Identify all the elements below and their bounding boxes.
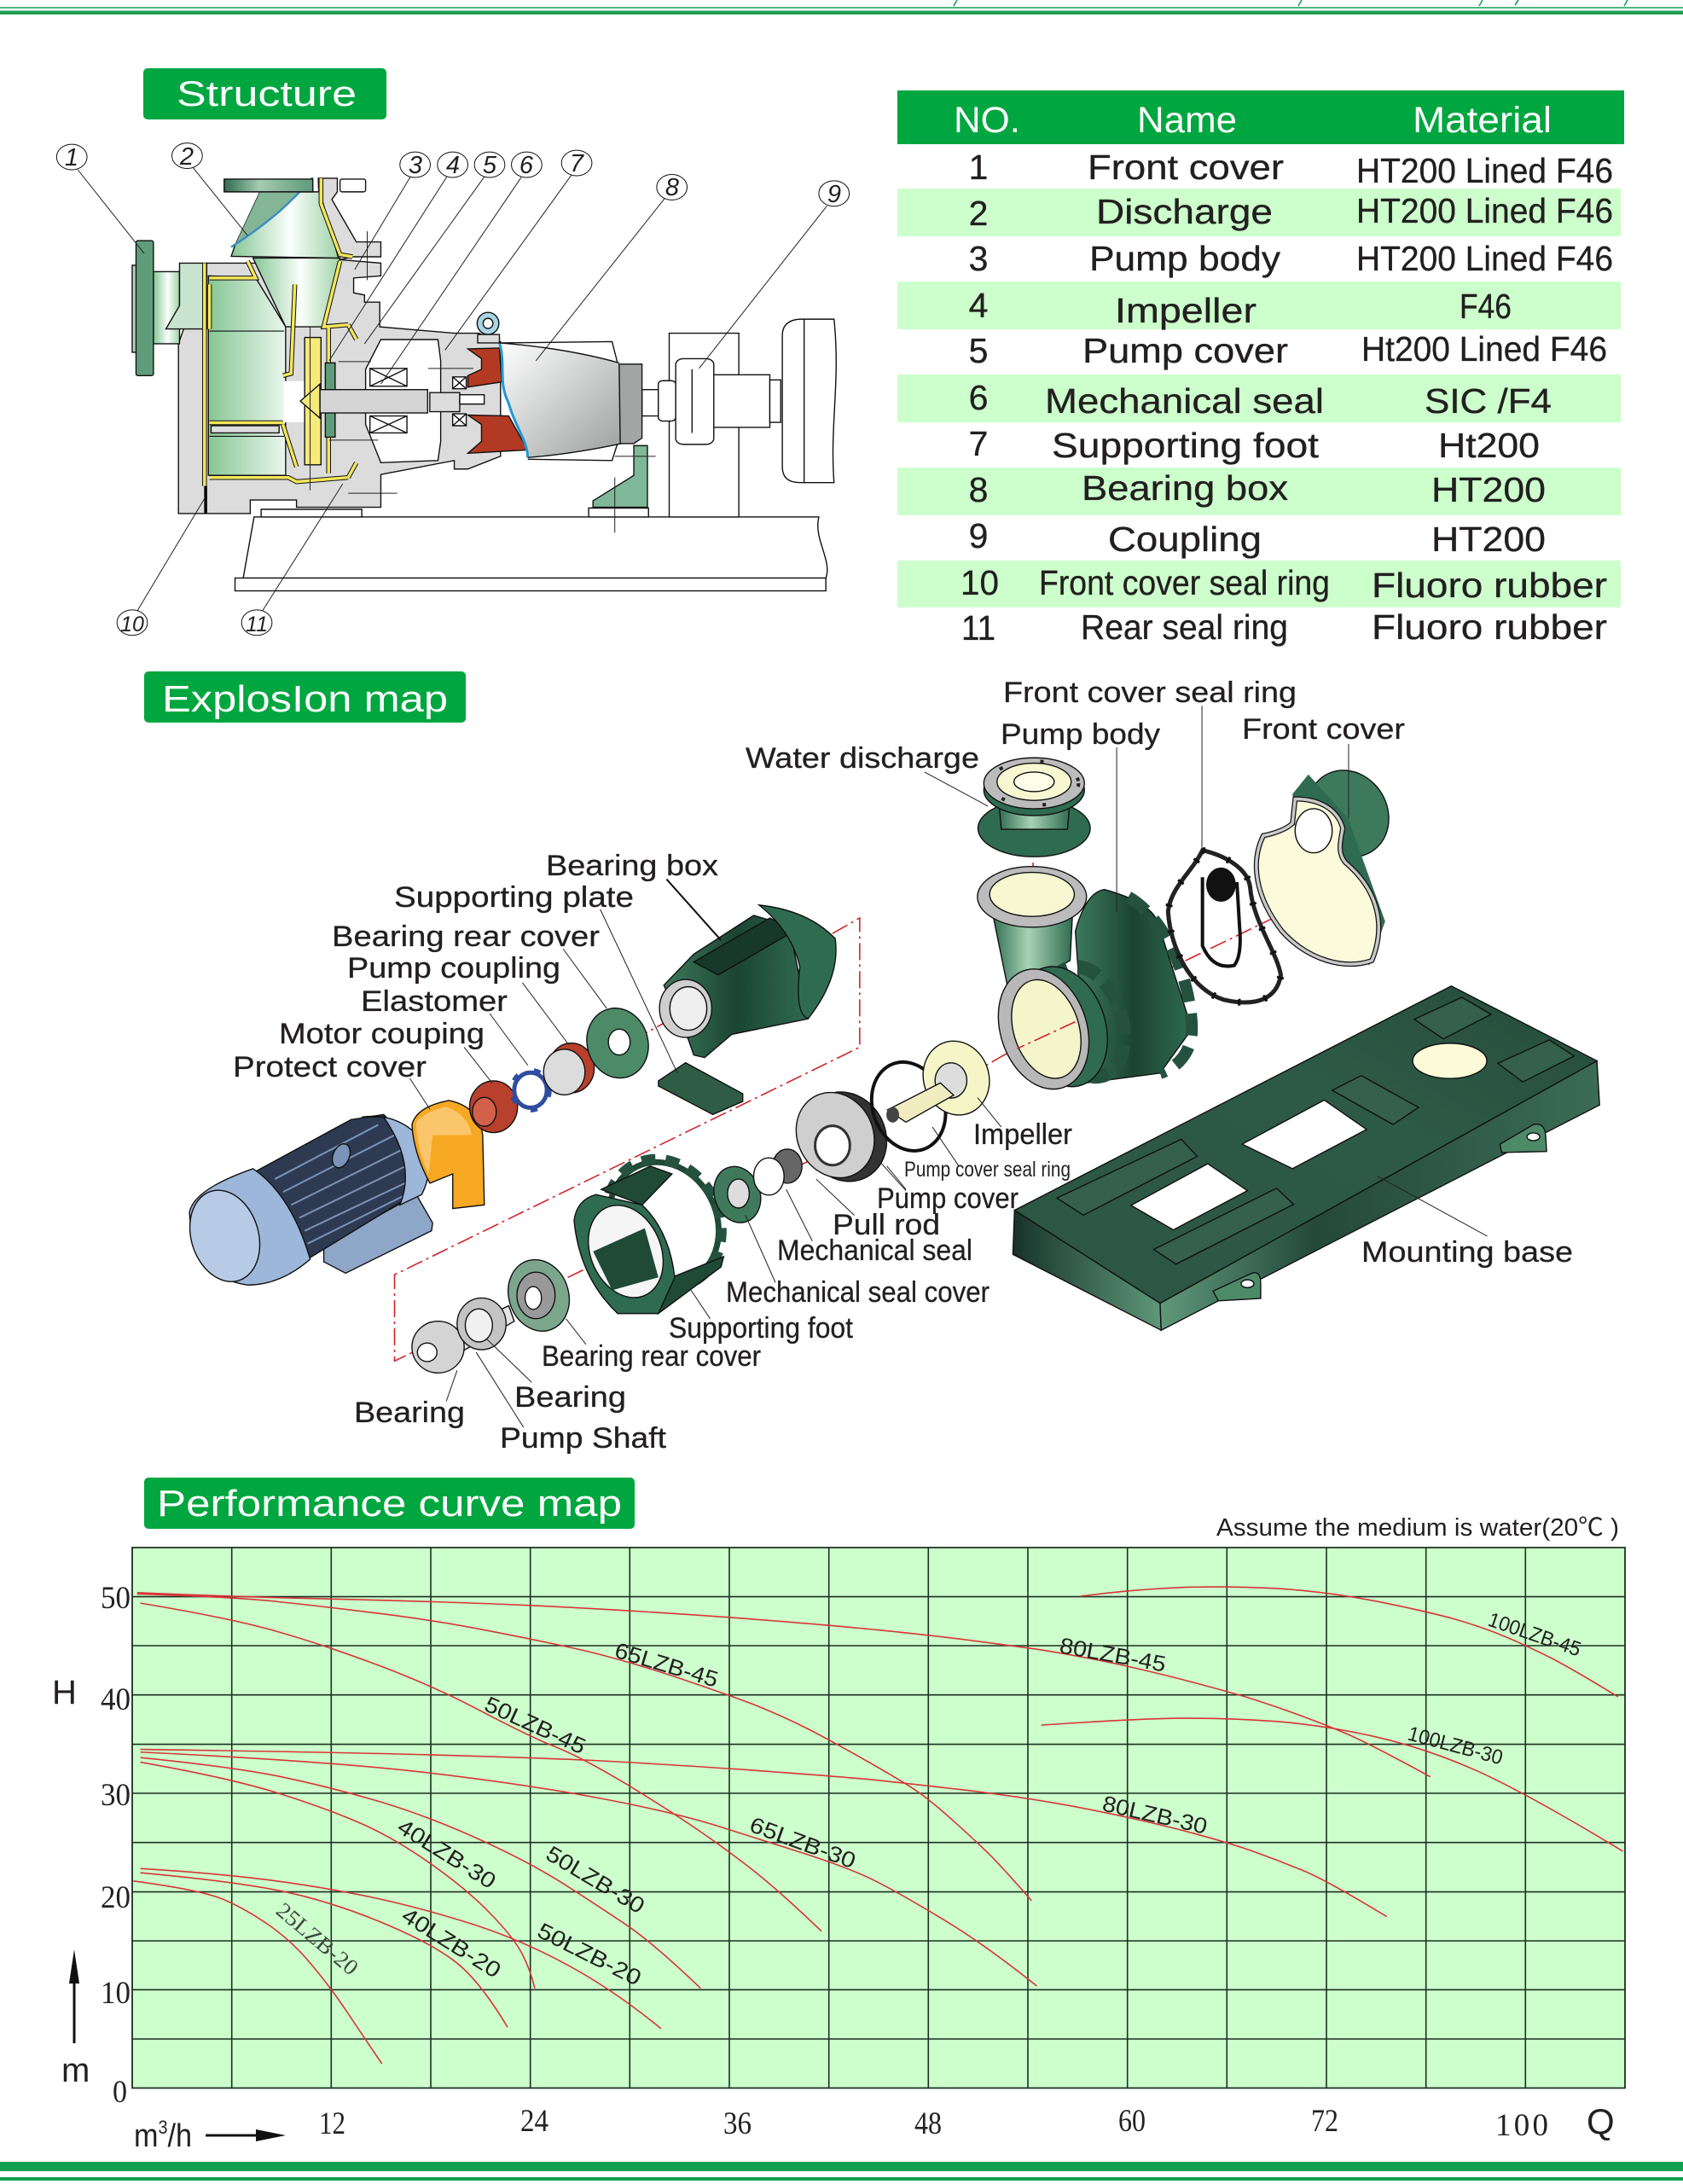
axis labels: H metres: 10 bbox=[101, 1976, 131, 2011]
table: parts and materials: HT200 Lined F46 bbox=[1356, 191, 1613, 230]
callout labels: explosion map parts: Bearing bbox=[354, 1397, 465, 1429]
curve labels: 80LZB-30 bbox=[1100, 1791, 1210, 1839]
callout labels: explosion map parts: Mechanical seal bbox=[777, 1234, 972, 1267]
table: parts and materials: 10 bbox=[960, 563, 999, 602]
table: parts and materials: Coupling bbox=[1108, 520, 1262, 559]
table: parts and materials: Ht200 Lined F46 bbox=[1361, 329, 1607, 369]
callout labels: explosion map parts: Front cover bbox=[1242, 713, 1405, 746]
curve labels: 50LZB-45 bbox=[481, 1691, 590, 1759]
axis labels: Q flow: 48 bbox=[914, 2106, 942, 2141]
diagram: pump cross-section: 10 bbox=[120, 613, 144, 636]
diagram: pump cross-section: 9 bbox=[827, 181, 841, 208]
diagram: exploded pump body, cover and mounting base bbox=[862, 706, 1599, 1330]
axis labels: Q flow: 60 bbox=[1118, 2104, 1146, 2139]
axis labels: H metres: 30 bbox=[101, 1778, 131, 1813]
callout labels: explosion map parts: Pump Shaft bbox=[500, 1422, 667, 1455]
curve labels bbox=[271, 1608, 1584, 1990]
table: parts and materials: Bearing box bbox=[1082, 468, 1289, 508]
callout labels: explosion map parts: Front cover seal ring bbox=[1003, 677, 1297, 709]
curves bbox=[133, 1587, 1623, 2064]
callout labels: explosion map parts: Pump cover seal ring bbox=[904, 1158, 1071, 1182]
diagram: pump cross-section: 1 bbox=[65, 144, 78, 171]
table: parts and materials: 2 bbox=[969, 194, 988, 233]
axis labels: Q flow: /h bbox=[167, 2118, 192, 2154]
callout labels: explosion map parts: Impeller bbox=[973, 1118, 1072, 1151]
table: parts and materials: 8 bbox=[969, 470, 988, 509]
axis labels: Q flow: 3 bbox=[158, 2117, 167, 2138]
table: parts and materials: Name bbox=[1137, 100, 1237, 141]
table: parts and materials: 9 bbox=[969, 516, 988, 555]
heading: Structure: Structure bbox=[177, 73, 357, 113]
axis labels: Q flow: m bbox=[134, 2118, 161, 2154]
table: parts and materials: Front cover bbox=[1088, 148, 1284, 187]
heading: Performance curve map bbox=[144, 1478, 635, 1529]
callout labels: explosion map parts: Bearing rear cover bbox=[542, 1340, 761, 1373]
diagram: pump cross-section: 11 bbox=[246, 613, 268, 636]
curve labels: 65LZB-30 bbox=[746, 1811, 859, 1873]
axis labels: Q flow: 100 bbox=[1495, 2108, 1548, 2143]
table: parts and materials: 7 bbox=[969, 424, 988, 463]
diagram: pump cross-section: 8 bbox=[665, 174, 679, 201]
curve labels: 100LZB-45 bbox=[1485, 1608, 1584, 1661]
diagram: pump cross-section: 3 bbox=[409, 152, 422, 179]
callout labels: explosion map parts: Pump coupling bbox=[347, 952, 560, 985]
bottom rule bbox=[0, 2162, 1683, 2181]
axis labels: Q flow: Q bbox=[1587, 2101, 1615, 2141]
axis labels: H metres: 40 bbox=[101, 1682, 131, 1717]
curve labels: 100LZB-30 bbox=[1405, 1722, 1506, 1769]
curve labels: 50LZB-30 bbox=[542, 1840, 649, 1919]
table: parts and materials: Rear seal ring bbox=[1081, 607, 1288, 647]
axis labels: H metres: m bbox=[61, 2052, 90, 2089]
curve labels: 40LZB-30 bbox=[393, 1814, 501, 1894]
callout labels: explosion map parts: Pull rod bbox=[833, 1209, 940, 1241]
table: parts and materials: 5 bbox=[969, 331, 988, 370]
callout labels: explosion map parts: Elastomer bbox=[361, 985, 508, 1018]
callout labels: explosion map parts: Motor couping bbox=[279, 1018, 485, 1050]
table: parts and materials: Impeller bbox=[1115, 291, 1256, 330]
chart: performance curves bbox=[132, 1548, 1625, 2088]
top rule bbox=[0, 0, 1683, 15]
table: parts and materials: F46 bbox=[1460, 287, 1512, 326]
callout labels: explosion map parts: Supporting foot bbox=[669, 1312, 854, 1345]
axis labels: Q flow: 72 bbox=[1311, 2104, 1338, 2139]
callout labels: explosion map parts: Bearing bbox=[514, 1381, 626, 1414]
heading: Explosion map bbox=[144, 671, 466, 723]
axis labels: H metres: 20 bbox=[101, 1880, 131, 1915]
heading: Explosion map: ExplosIon map bbox=[162, 678, 448, 720]
table: parts and materials: Fluoro rubber bbox=[1372, 607, 1607, 647]
diagram: exploded motor and bearing parts bbox=[179, 880, 906, 1427]
axis labels: Q flow: 36 bbox=[723, 2106, 752, 2141]
table: parts and materials: HT200 bbox=[1431, 470, 1546, 509]
diagram: pump cross-section: 7 bbox=[570, 150, 585, 177]
table: parts and materials: 4 bbox=[969, 286, 988, 325]
callout labels: explosion map parts: Mechanical seal cover bbox=[726, 1276, 989, 1309]
table: parts and materials bbox=[897, 90, 1624, 648]
table: parts and materials: Supporting foot bbox=[1052, 426, 1320, 465]
note: medium assumption: Assume the medium is water(20℃ ) bbox=[1216, 1514, 1619, 1542]
table: parts and materials: NO. bbox=[954, 100, 1020, 141]
table: parts and materials: 1 bbox=[969, 148, 988, 187]
table: parts and materials: Pump body bbox=[1089, 239, 1281, 278]
callout labels: explosion map parts: Bearing box bbox=[546, 850, 718, 882]
table: parts and materials: Discharge bbox=[1096, 192, 1273, 231]
heading: Structure bbox=[143, 68, 386, 119]
axis labels: H metres: 50 bbox=[101, 1581, 131, 1616]
diagram: pump cross-section bbox=[56, 143, 850, 636]
curve labels: 80LZB-45 bbox=[1058, 1632, 1168, 1677]
callout labels: explosion map parts: Pump body bbox=[1001, 718, 1160, 751]
table: parts and materials: Material bbox=[1413, 100, 1552, 141]
table: parts and materials: Mechanical seal bbox=[1045, 381, 1324, 421]
diagram: pump cross-section: 6 bbox=[519, 152, 534, 179]
curve labels: 25LZB-20 bbox=[271, 1897, 363, 1980]
axis labels: H metres bbox=[52, 1581, 131, 2110]
axis labels: Q flow: 12 bbox=[319, 2106, 345, 2141]
table: parts and materials: Pump cover bbox=[1082, 331, 1288, 370]
table: parts and materials: HT200 bbox=[1431, 520, 1546, 559]
diagram: pump cross-section: 4 bbox=[446, 152, 460, 179]
callout labels: explosion map parts bbox=[233, 677, 1573, 1455]
table: parts and materials: HT200 Lined F46 bbox=[1356, 239, 1613, 278]
axis labels: Q flow bbox=[134, 2101, 1615, 2154]
callout labels: explosion map parts: Pump cover bbox=[877, 1182, 1019, 1215]
callout labels: explosion map parts: Mounting base bbox=[1361, 1236, 1573, 1269]
curve labels: 40LZB-20 bbox=[398, 1902, 506, 1984]
diagram: pump cross-section: 5 bbox=[483, 152, 497, 179]
table: parts and materials: Fluoro rubber bbox=[1372, 566, 1607, 605]
callout labels: explosion map parts: Protect cover bbox=[233, 1051, 427, 1083]
axis labels: H metres: H bbox=[52, 1674, 77, 1711]
curve labels: 65LZB-45 bbox=[612, 1637, 722, 1693]
curve labels: 50LZB-20 bbox=[533, 1918, 646, 1990]
table: parts and materials: 11 bbox=[961, 608, 995, 648]
callout labels: explosion map parts: Water discharge bbox=[746, 742, 979, 775]
heading: Performance curve map: Performance curve map bbox=[157, 1483, 622, 1525]
axis labels: Q flow: 24 bbox=[520, 2104, 548, 2139]
table: parts and materials: 6 bbox=[969, 378, 988, 417]
diagram: pump cross-section: 2 bbox=[179, 143, 194, 171]
table: parts and materials: 3 bbox=[969, 239, 988, 278]
axis labels: H metres: 0 bbox=[113, 2075, 127, 2110]
table: parts and materials: HT200 Lined F46 bbox=[1356, 151, 1613, 190]
table: parts and materials: SIC /F4 bbox=[1425, 381, 1552, 421]
callout labels: explosion map parts: Bearing rear cover bbox=[332, 921, 600, 953]
table: parts and materials: Front cover seal ring bbox=[1039, 563, 1330, 602]
table: parts and materials: Ht200 bbox=[1438, 426, 1540, 465]
callout labels: explosion map parts: Supporting plate bbox=[394, 881, 634, 914]
